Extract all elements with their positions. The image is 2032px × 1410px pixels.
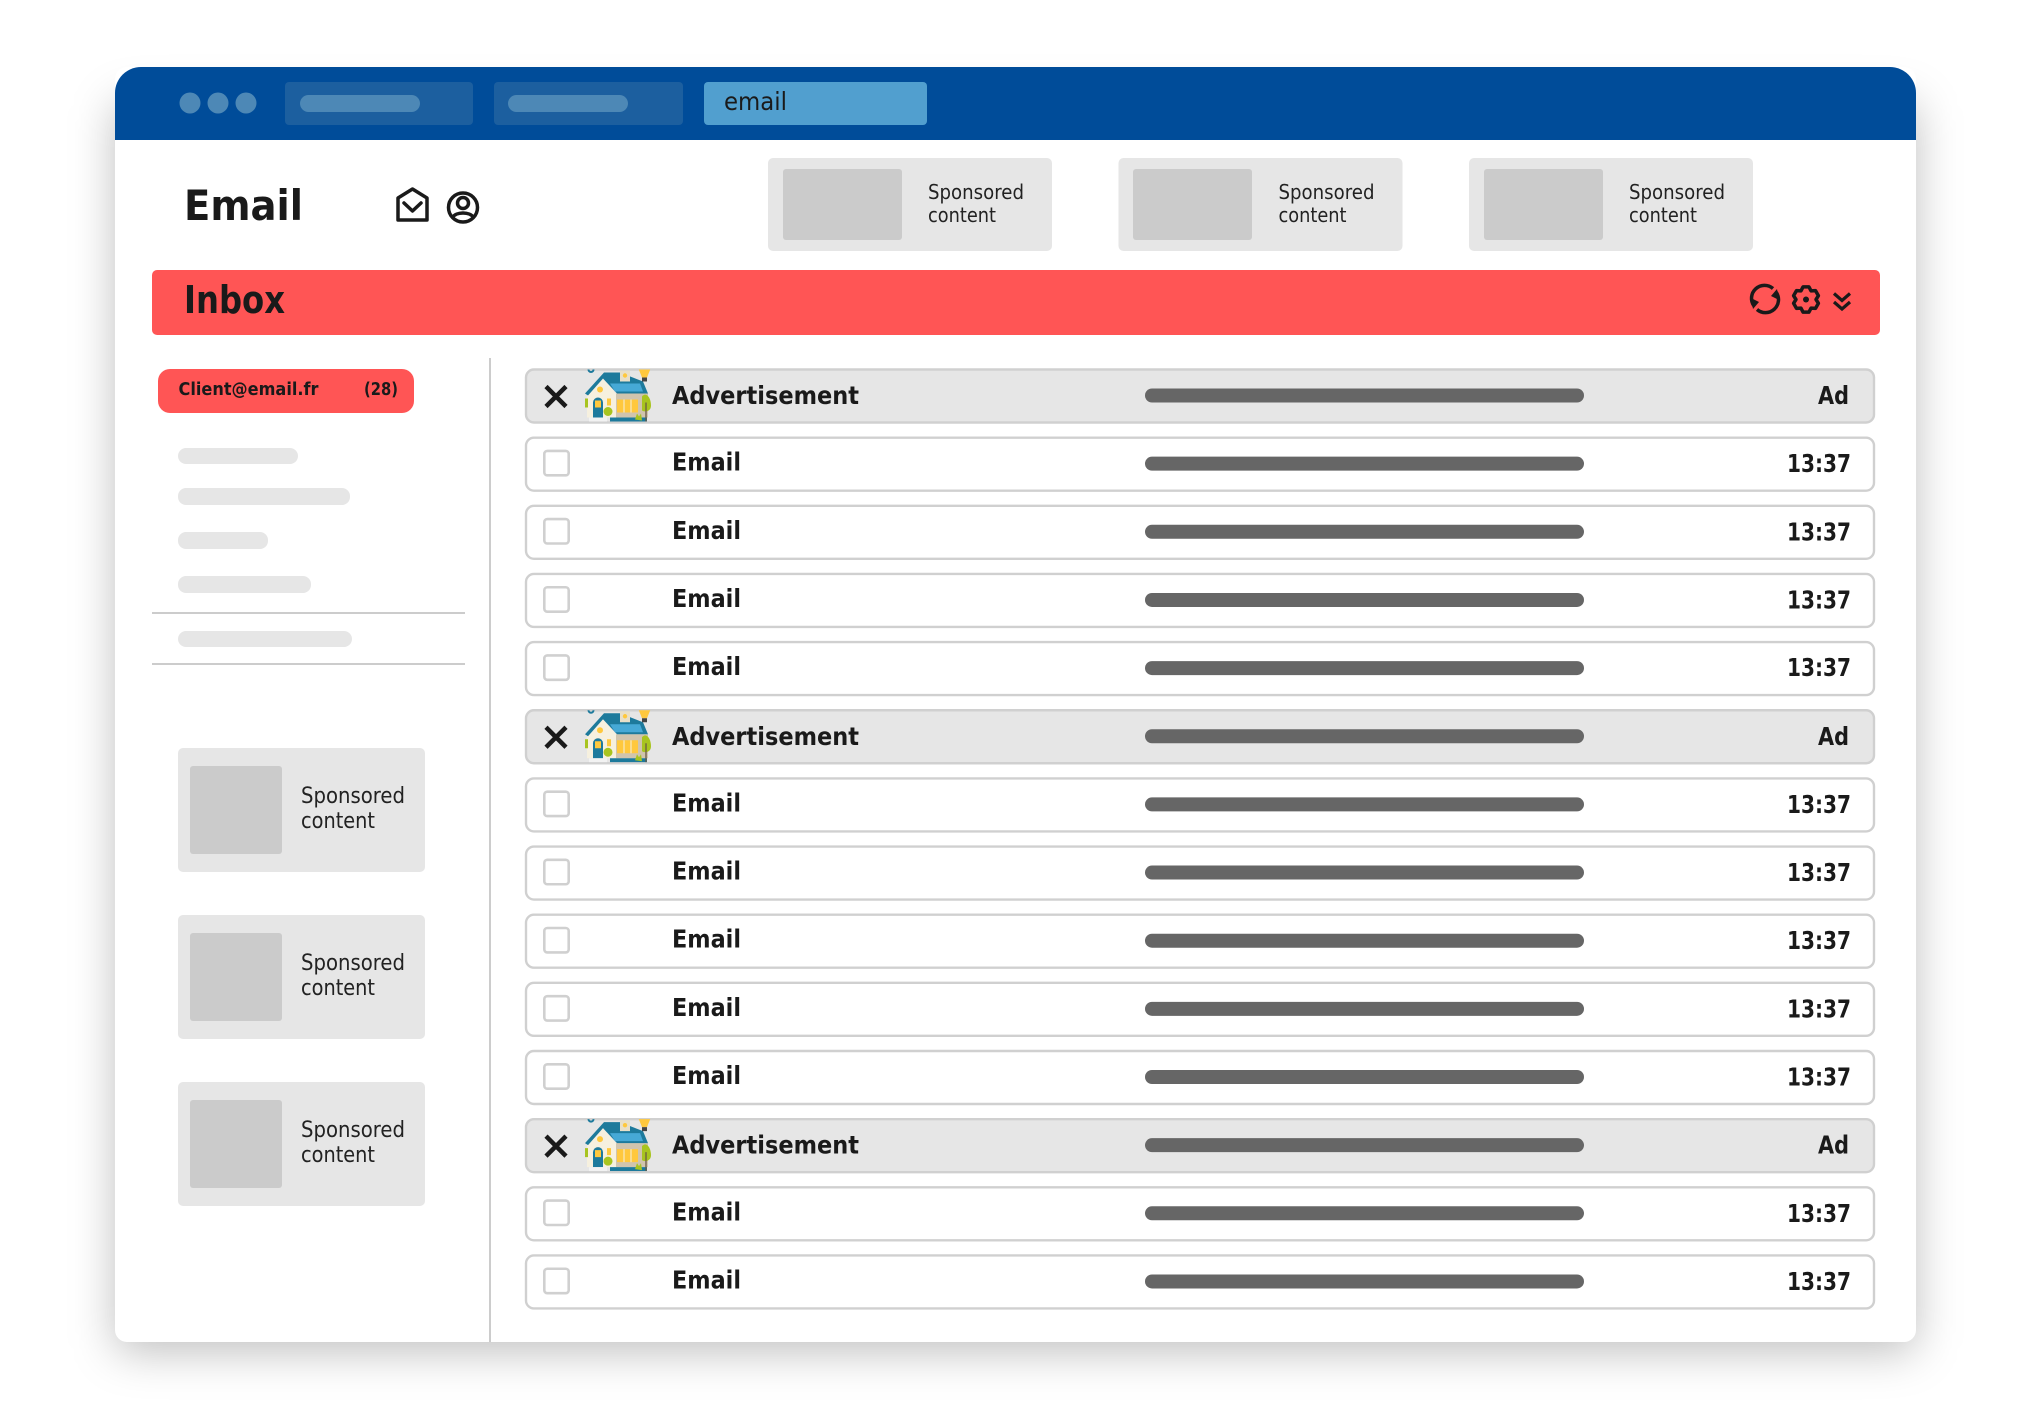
window shadow [115,102,1916,1352]
email row 2: 13:37 [1787,517,1851,546]
icon: settings gear [1794,287,1818,312]
email row 2: Email [672,516,741,545]
sponsored card top 3 [1469,158,1753,251]
email row 8 [526,983,1874,1036]
window control dots [180,92,256,114]
ad row 2: Ad [1818,722,1849,751]
email row 2 [526,506,1874,559]
sponsored card sidebar 2 [178,915,425,1039]
email row 7: 13:37 [1787,926,1851,955]
sponsored card top 2 [1118,158,1402,251]
sponsored card sidebar 3: content [301,1143,375,1168]
ad row 2: Advertisement [672,722,859,751]
icon: double chevron [1834,294,1850,309]
email row 1 [526,438,1874,491]
ad row 3: Ad [1818,1131,1849,1160]
email row 4 [526,642,1874,695]
sidebar account pill: (28) [364,379,398,400]
email row 10: Email [672,1197,741,1226]
email row 3 [526,574,1874,627]
sponsored card sidebar 1: content [301,809,375,834]
sponsored card top 2: content [1278,203,1347,227]
sponsored card sidebar 3 [178,1082,425,1206]
email row 11: 13:37 [1787,1267,1851,1296]
email row 6: Email [672,857,741,886]
ad row 1 [526,367,1874,422]
email row 10: 13:37 [1787,1199,1851,1228]
email row 1: 13:37 [1787,449,1851,478]
email row 8: Email [672,993,741,1022]
email row 9: 13:37 [1787,1062,1851,1092]
icon: refresh [1751,285,1779,313]
sponsored card top 3: Sponsored [1629,180,1725,204]
active browser tab: email: email [724,87,787,116]
email row 6 [526,847,1874,900]
email row 9 [526,1051,1874,1104]
sponsored card top 1: Sponsored [928,180,1024,204]
email row 8: 13:37 [1787,994,1851,1023]
heading: Email: Email [184,181,303,230]
email row 9: Email [672,1061,741,1090]
browser tab 2 [494,82,683,125]
ad row 3 [526,1117,1874,1172]
sponsored card top 1 [768,158,1052,251]
email row 5 [526,778,1874,831]
email row 3: 13:37 [1787,585,1851,614]
email row 10 [526,1187,1874,1240]
ad row 1: Ad [1818,381,1849,410]
email row 1: Email [672,448,741,477]
sponsored card top 1: content [928,203,996,227]
email row 3: Email [672,584,741,613]
ad row 3: Advertisement [672,1131,859,1160]
email row 4: Email [672,652,741,681]
ad row 1: Advertisement [672,381,859,410]
sponsored card top 3: content [1629,203,1697,227]
sponsored card sidebar 1 [178,748,425,872]
icon: user account [448,193,478,222]
email row 4: 13:37 [1787,653,1851,682]
email row 11: Email [672,1265,741,1294]
sponsored card sidebar 2: Sponsored [301,951,405,976]
sidebar account pill [158,369,414,413]
inbox bar [152,270,1880,335]
browser title bar [115,67,1916,140]
email row 5: Email [672,788,741,817]
ad row 2 [526,708,1874,763]
heading: Inbox: Inbox [184,278,285,322]
sponsored card sidebar 1: Sponsored [301,784,405,809]
sidebar menu placeholders [178,448,352,647]
active browser tab: email [704,82,927,125]
sponsored card top 2: Sponsored [1278,180,1374,204]
email row 6: 13:37 [1787,858,1851,887]
icon: open envelope [398,189,427,220]
email row 7 [526,915,1874,968]
browser tab 1 [285,82,473,125]
sponsored card sidebar 2: content [301,976,375,1001]
sidebar account pill: Client@email.fr [178,379,319,400]
email row 5: 13:37 [1787,790,1851,819]
email row 11 [526,1255,1874,1308]
email row 7: Email [672,925,741,954]
sponsored card sidebar 3: Sponsored [301,1118,405,1143]
